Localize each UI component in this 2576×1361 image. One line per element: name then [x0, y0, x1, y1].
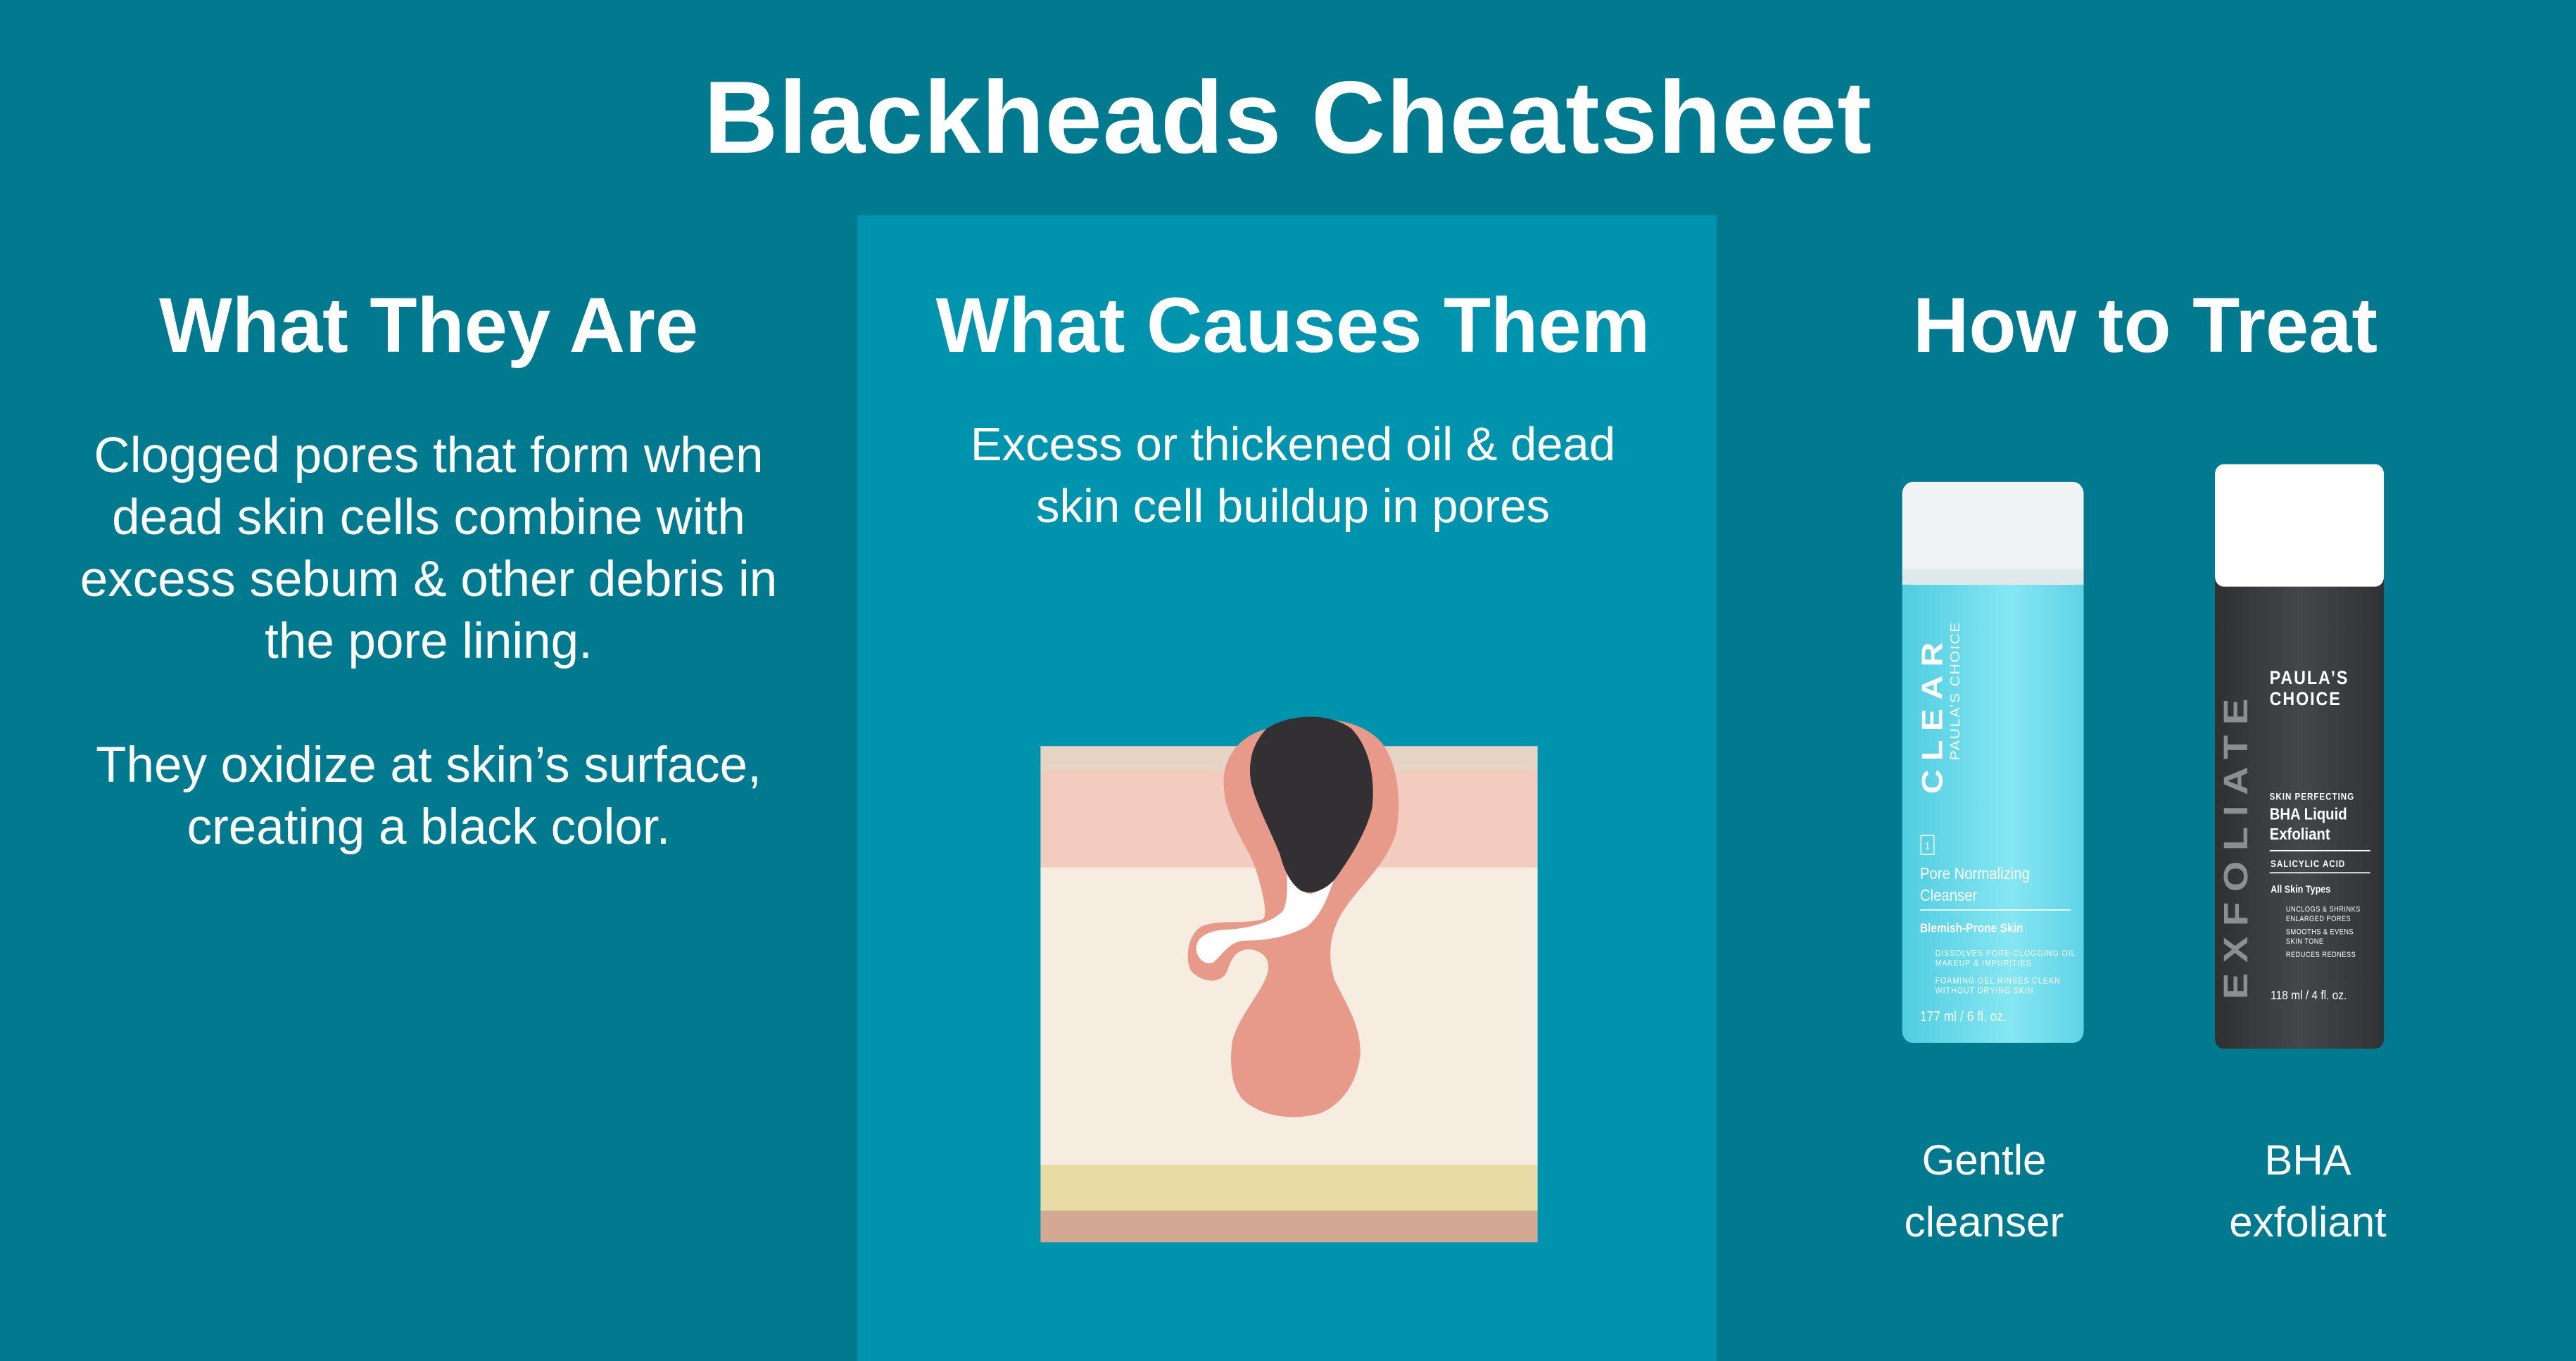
- product: bha exfoliant: CHOICE: [2270, 688, 2342, 709]
- text: gentle cleanser label: [1905, 1137, 2064, 1246]
- product: clear cleanser: PAULA’S CHOICE: [1948, 621, 1963, 761]
- text block: causes: [971, 418, 1615, 533]
- panel: middle background: [857, 215, 1717, 1361]
- text: bha exfoliant label: exfoliant: [2229, 1198, 2387, 1246]
- product: bha exfoliant: SALICYLIC ACID: [2271, 859, 2345, 869]
- product: bha exfoliant: PAULA’S: [2270, 668, 2349, 689]
- text block: definition: excess sebum & other debris in: [80, 552, 777, 607]
- product: bha exfoliant: UNCLOGS & SHRINKS: [2286, 906, 2361, 914]
- heading: how to treat: How to Treat: [1913, 282, 2378, 369]
- product: clear cleanser: FOAMING GEL RINSES CLEAN: [1936, 977, 2061, 986]
- product: bha exfoliant: SKIN TONE: [2286, 937, 2324, 946]
- product: bha exfoliant: ENLARGED PORES: [2286, 915, 2351, 923]
- product: clear cleanser: Cleanser: [1920, 885, 1977, 904]
- text block: definition: Clogged pores that form when: [94, 428, 764, 483]
- text: bha exfoliant label: [2229, 1137, 2387, 1246]
- product: bha exfoliant: SKIN PERFECTING: [2270, 792, 2354, 802]
- product: clear cleanser: WITHOUT DRYING SKIN: [1936, 987, 2034, 996]
- text block: definition: dead skin cells combine with: [112, 490, 745, 545]
- product: bha exfoliant: 118 ml / 4 fl. oz.: [2271, 988, 2347, 1002]
- product: clear cleanser: CLEAR: [1915, 633, 1949, 794]
- text: bha exfoliant label: BHA: [2264, 1137, 2351, 1184]
- text: gentle cleanser label: cleanser: [1905, 1198, 2064, 1246]
- chart: skin pore diagram: [1040, 716, 1538, 1243]
- heading: what they are: What They Are: [159, 282, 698, 369]
- icon: products: [1902, 464, 2385, 1049]
- text block: definition: the pore lining.: [265, 614, 593, 669]
- product: bha exfoliant: SMOOTHS & EVENS: [2286, 928, 2354, 937]
- product: bha exfoliant: REDUCES REDNESS: [2286, 951, 2356, 959]
- text block: definition: creating a black color.: [187, 799, 670, 855]
- product: bha exfoliant: BHA Liquid: [2270, 804, 2347, 823]
- product: bha exfoliant: Exfoliant: [2270, 824, 2330, 843]
- product: clear cleanser: 177 ml / 6 fl. oz.: [1920, 1008, 2007, 1024]
- text block: definition: They oxidize at skin’s surface,: [96, 738, 762, 793]
- product: clear cleanser: DISSOLVES PORE-CLOGGING OIL: [1936, 949, 2076, 958]
- product: bha exfoliant: All Skin Types: [2271, 884, 2331, 895]
- text: gentle cleanser label: Gentle: [1922, 1137, 2046, 1184]
- text block: causes: Excess or thickened oil & dead: [971, 418, 1615, 471]
- heading: what causes them: What Causes Them: [936, 282, 1650, 369]
- product: clear cleanser: MAKEUP & IMPURITIES: [1936, 959, 2032, 968]
- text block: causes: skin cell buildup in pores: [1036, 480, 1550, 533]
- product: clear cleanser: 1: [1925, 840, 1930, 852]
- product: clear cleanser: [1902, 482, 2084, 1043]
- product: clear cleanser: Blemish-Prone Skin: [1920, 921, 2023, 935]
- product: bha exfoliant: [2215, 464, 2384, 1049]
- product: clear cleanser: Pore Normalizing: [1920, 864, 2030, 882]
- icon: pore: [1188, 716, 1399, 1117]
- product: bha exfoliant: EXFOLIATE: [2218, 688, 2255, 999]
- text block: definition: [80, 428, 777, 855]
- title: Blackheads Cheatsheet: [704, 60, 1872, 175]
